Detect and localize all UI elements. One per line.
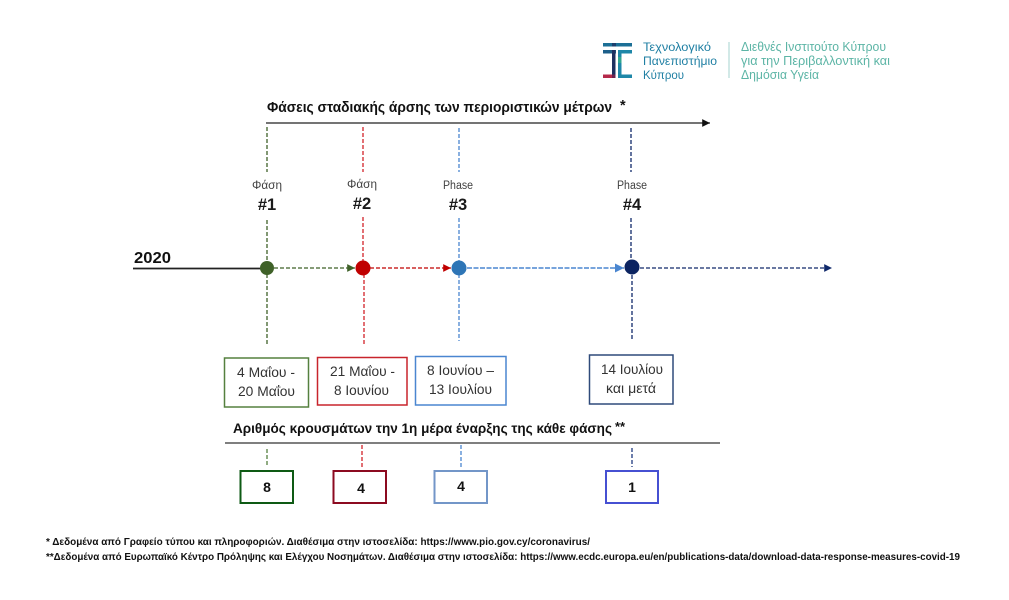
timeline: baseline 2020: 2020 bbox=[134, 250, 171, 267]
date box: phase 3: 8 Ιουνίου – bbox=[427, 362, 494, 378]
date box: phase 2: 21 Μαΐου - bbox=[330, 363, 395, 379]
date box: phase 1 bbox=[224, 358, 308, 407]
phase 1 marker: Φάση bbox=[252, 180, 282, 192]
date box: phase 4: και μετά bbox=[606, 380, 656, 396]
heading: phases of lifting measures: * bbox=[620, 98, 626, 114]
phase 1 marker: #1 bbox=[258, 196, 276, 214]
logo text: university name: Πανεπιστήμιο bbox=[643, 54, 717, 68]
heading: cases on first day of each phase: ** bbox=[615, 419, 626, 434]
logo text: institute name: για την Περιβαλλοντική και bbox=[741, 54, 890, 68]
date box: phase 1: 4 Μαΐου - bbox=[237, 364, 295, 380]
phase 2 marker: Φάση bbox=[347, 179, 377, 191]
case count: phase 2 bbox=[334, 445, 386, 503]
logo text: institute name: Δημόσια Υγεία bbox=[741, 68, 819, 82]
case count: phase 3 bbox=[434, 445, 487, 503]
phase 3 marker: Phase bbox=[443, 180, 473, 192]
phase 3 marker bbox=[443, 128, 624, 341]
case count: phase 1 bbox=[240, 449, 293, 503]
date box: phase 4: 14 Ιουλίου bbox=[601, 361, 663, 377]
phase 4 marker bbox=[617, 128, 832, 340]
phase 3 marker: #3 bbox=[449, 196, 467, 214]
logo text: university name bbox=[643, 40, 717, 82]
date box: phase 2 bbox=[318, 358, 407, 405]
case count: phase 4: 1 bbox=[628, 479, 636, 495]
phase 1 marker bbox=[252, 127, 355, 346]
icon: university emblem bbox=[603, 43, 632, 78]
logo text: institute name bbox=[741, 40, 890, 82]
case count: phase 4 bbox=[606, 448, 658, 503]
heading: cases on first day of each phase: Αριθμός κρουσμάτων την 1η μέρα έναρξης της κάθε φάσης bbox=[233, 421, 612, 436]
case count: phase 3: 4 bbox=[457, 478, 465, 494]
footnotes: data sources: **Δεδομένα από Ευρωπαϊκό Κέντρο Πρόληψης και Ελέγχου Νοσημάτων. Διαθέσιμα στην ιστοσελίδα: https://www.ecdc.europa.eu/en/publications-data/download-data-response-measures-covid-19 bbox=[46, 551, 960, 563]
divider line under cases heading bbox=[225, 442, 720, 444]
logo text: university name: Τεχνολογικό bbox=[643, 40, 711, 54]
footnotes: data sources: * Δεδομένα από Γραφείο τύπου και πληροφοριών. Διαθέσιμα στην ιστοσελίδα: https://www.pio.gov.cy/coronavirus/ bbox=[46, 536, 590, 548]
logo text: university name: Κύπρου bbox=[643, 68, 684, 82]
date box: phase 1: 20 Μαΐου bbox=[238, 383, 295, 399]
logo: Cyprus University of Technology bbox=[603, 40, 890, 82]
case count: phase 2: 4 bbox=[357, 480, 365, 496]
arrow: phase 2 to phase 3 bbox=[370, 267, 451, 269]
arrow: phase 1 to phase 2 bbox=[274, 267, 355, 269]
case count: phase 1: 8 bbox=[263, 479, 271, 495]
arrow: phase 3 to phase 4 bbox=[467, 267, 624, 269]
date box: phase 2: 8 Ιουνίου bbox=[334, 382, 389, 398]
timeline: baseline 2020 bbox=[133, 250, 262, 268]
phase 4 marker: #4 bbox=[623, 196, 642, 214]
phase 2 marker bbox=[347, 127, 451, 346]
logo text: institute name: Διεθνές Ινστιτούτο Κύπρου bbox=[741, 40, 886, 54]
date box: phase 4 bbox=[590, 355, 673, 404]
footnotes: data sources bbox=[46, 536, 960, 563]
date box: phase 3: 13 Ιουλίου bbox=[429, 381, 492, 397]
date box: phase 3 bbox=[416, 356, 506, 405]
heading: phases of lifting measures: Φάσεις σταδιακής άρσης των περιοριστικών μέτρων bbox=[267, 100, 612, 116]
phase 4 marker: Phase bbox=[617, 180, 647, 192]
phase 2 marker: #2 bbox=[353, 195, 371, 213]
arrow: phase 4 onward bbox=[640, 267, 832, 269]
arrow: phases axis bbox=[266, 122, 710, 124]
